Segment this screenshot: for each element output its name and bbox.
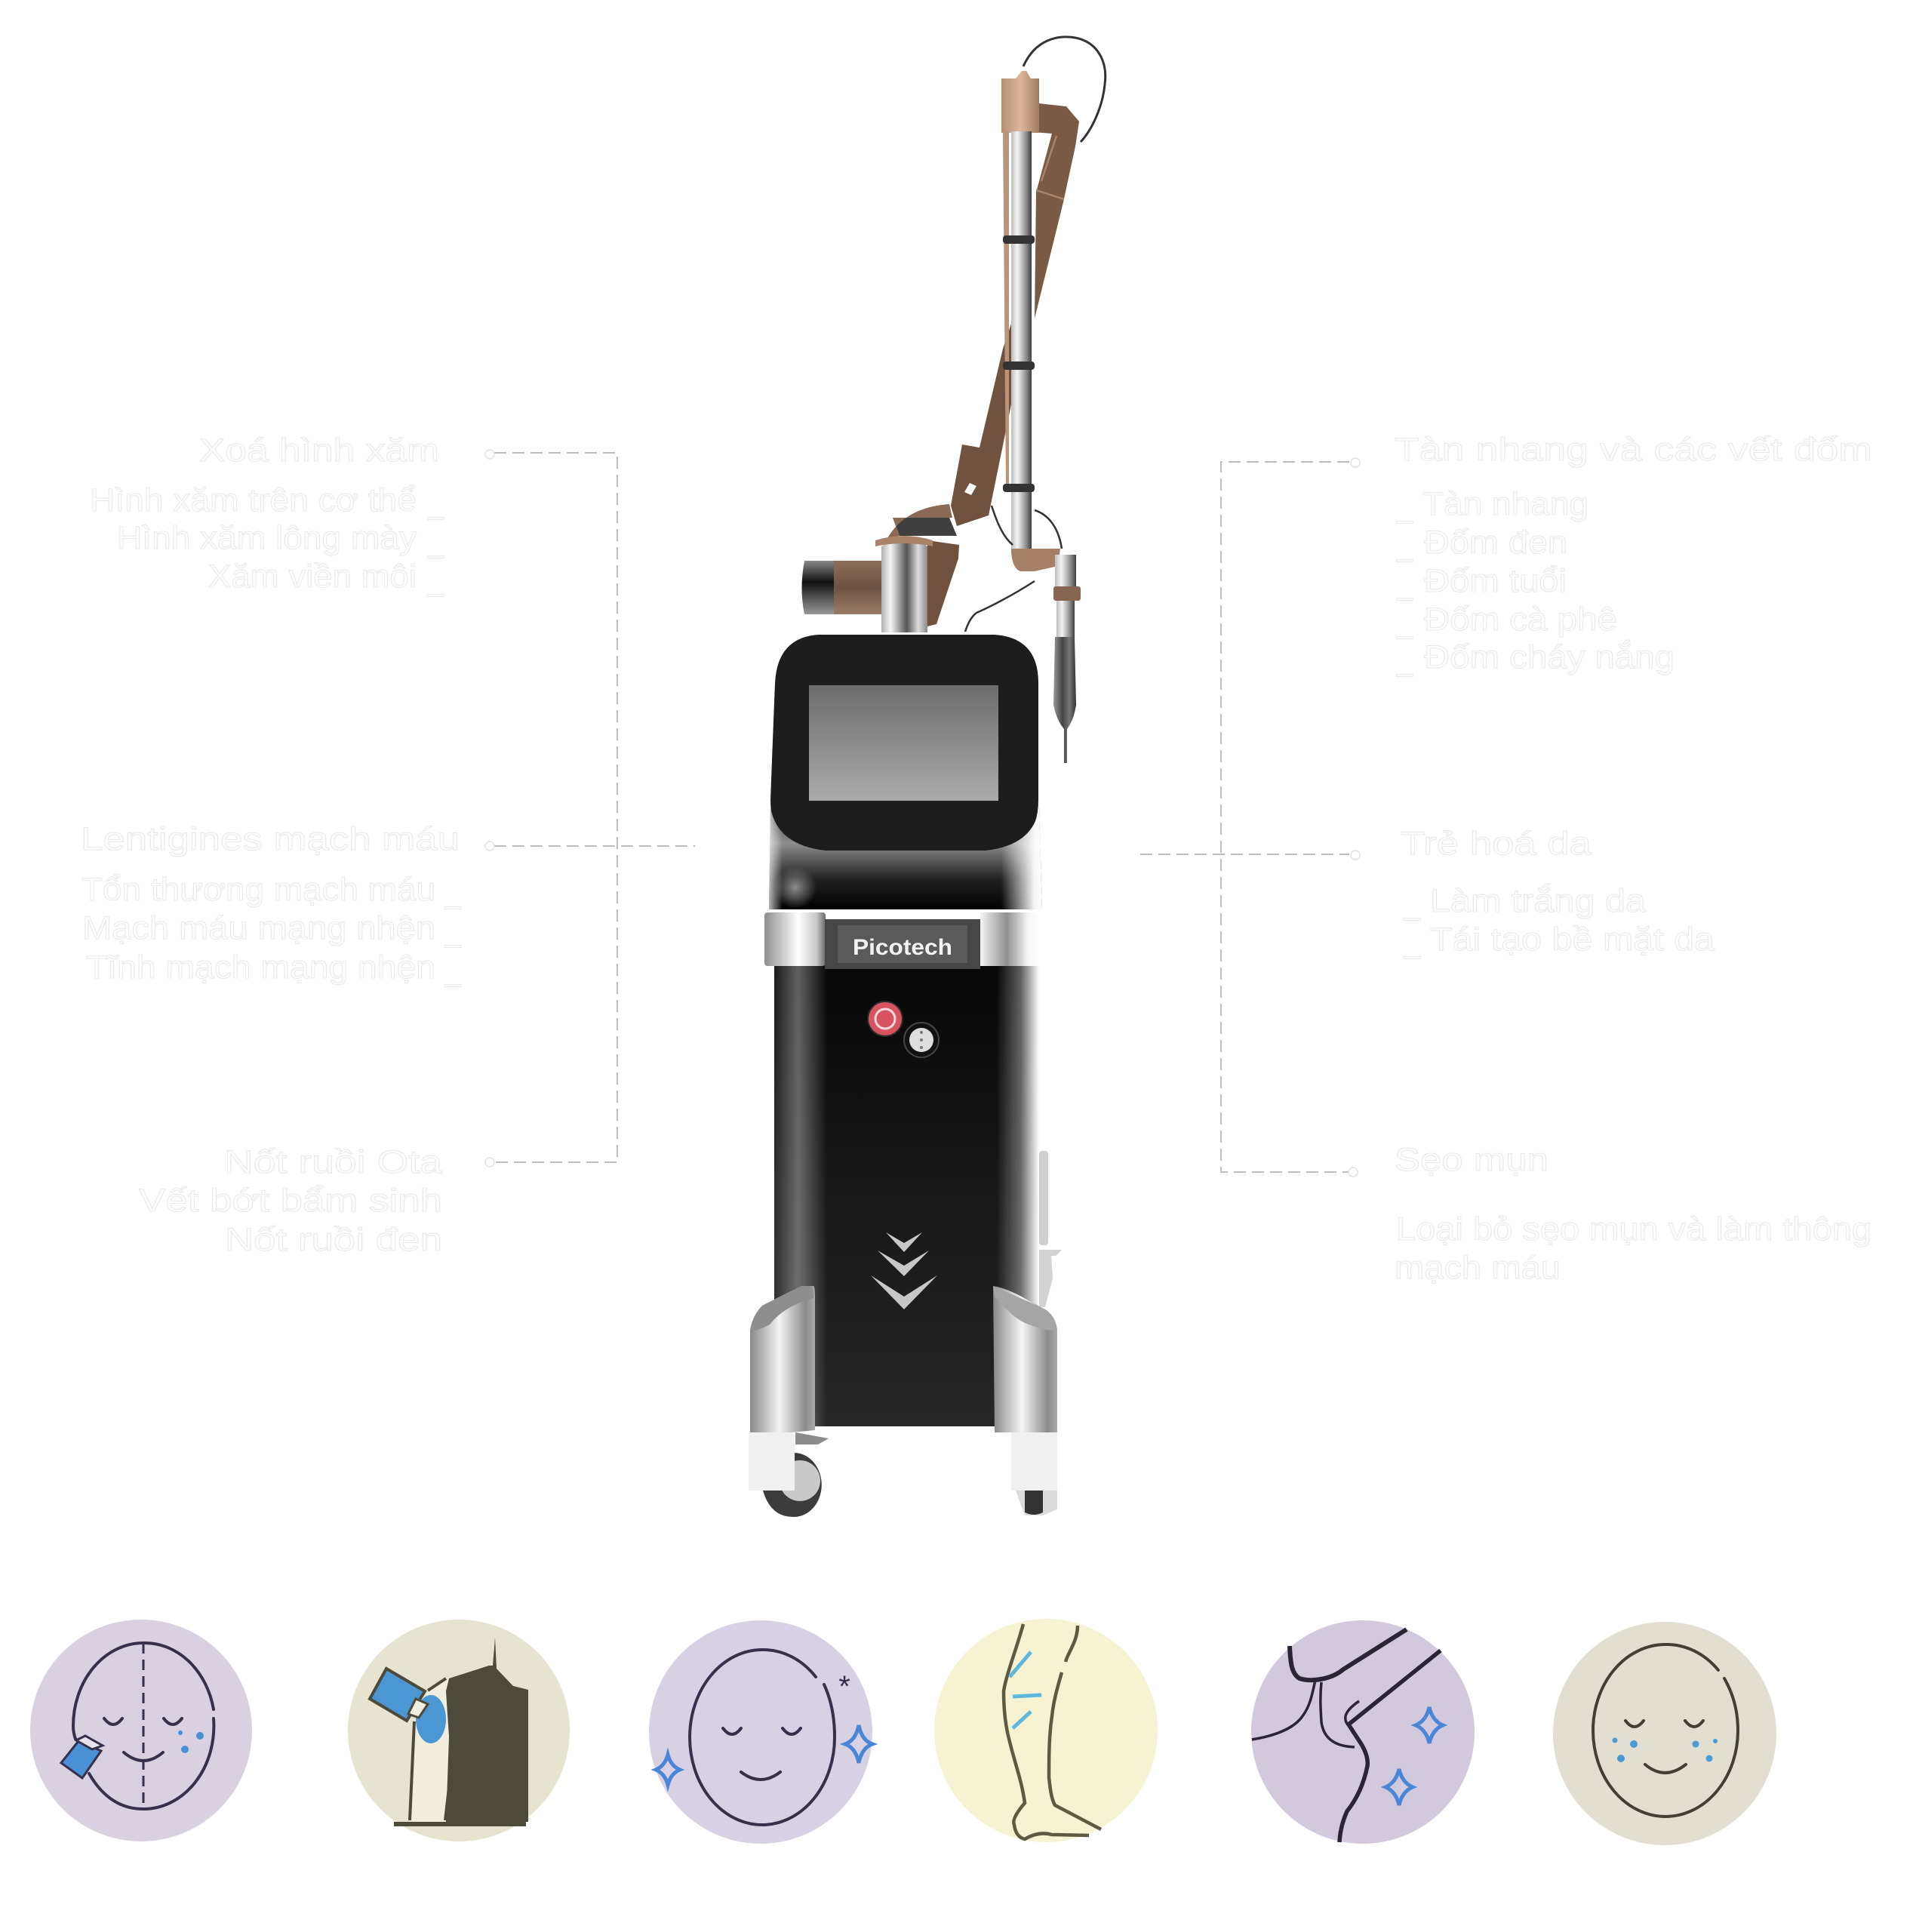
black cylinder end — [801, 561, 834, 614]
text block: freckles and spots: Đốm cà phê — [1424, 601, 1617, 638]
copper wedge behind column — [927, 540, 959, 626]
text block: freckles and spots: _ — [1396, 488, 1413, 525]
lower arm copper — [951, 324, 1011, 526]
left foot — [749, 1286, 829, 1517]
key switch — [904, 1023, 939, 1057]
black strap bottom — [1003, 484, 1035, 492]
articulated arm — [801, 37, 1106, 763]
text block: vascular lentigines: _ — [444, 952, 462, 988]
text block: tattoo removal: _ — [427, 523, 444, 559]
text block: skin rejuvenation: Làm trắng da — [1430, 883, 1646, 919]
text block: freckles and spots: Tàn nhang — [1422, 486, 1588, 522]
touch screen — [809, 685, 998, 801]
text block: skin rejuvenation — [1401, 826, 1715, 960]
text block: vascular lentigines: Tĩnh mạch mạng nhện — [86, 949, 435, 986]
upper arm copper — [1033, 103, 1079, 318]
text block: freckles and spots: Đốm đen — [1424, 525, 1567, 561]
emergency stop button — [867, 1001, 903, 1037]
text block: moles and birthmarks: Nốt ruồi đen — [225, 1222, 442, 1258]
text block: skin rejuvenation: _ — [1403, 924, 1421, 960]
machine: Picotech laser device — [749, 37, 1106, 1517]
text block: moles and birthmarks: Nốt ruồi Ota — [224, 1144, 442, 1180]
text block: freckles and spots: _ — [1396, 527, 1413, 563]
text block: tattoo removal: _ — [427, 561, 444, 598]
text block: freckles and spots: Đốm cháy nắng — [1424, 639, 1675, 675]
silver band right — [980, 912, 1039, 966]
body shoulder — [769, 808, 1042, 909]
text block: tattoo removal: Hình xăm lông mày — [117, 520, 417, 556]
copper hump — [887, 504, 952, 538]
dark top plate — [893, 518, 957, 536]
horizontal copper cylinder — [834, 561, 887, 614]
name badge — [825, 919, 980, 969]
text block: tattoo removal: Xăm viền môi — [208, 558, 417, 595]
text block: moles and birthmarks — [139, 1144, 442, 1258]
text block: skin rejuvenation: Trẻ hoá da — [1401, 826, 1592, 862]
text block: tattoo removal: Hình xăm trên cơ thể — [90, 482, 417, 518]
side holder — [1039, 1151, 1062, 1307]
copper elbow at top — [1001, 71, 1039, 133]
text block: tattoo removal — [90, 432, 444, 598]
icon: glowing face with sparkles — [649, 1620, 872, 1844]
text block: vascular lentigines: Mạch máu mạng nhện — [82, 910, 435, 946]
text block: moles and birthmarks: Vết bớt bẩm sinh — [139, 1183, 442, 1219]
text block: acne scars: Sẹo mụn — [1395, 1142, 1548, 1178]
copper side strip — [1003, 131, 1009, 486]
lower cables — [965, 506, 1062, 632]
icon: leg with spider veins — [934, 1619, 1158, 1842]
black strap top — [1003, 235, 1035, 244]
icon: glowing face with sparkles: * — [838, 1670, 850, 1703]
text block: acne scars: Loại bỏ sẹo mụn và làm thông — [1396, 1211, 1871, 1247]
icon: face treatment with dashed midline — [30, 1620, 252, 1841]
text block: tattoo removal: _ — [427, 485, 444, 521]
text block: vascular lentigines: _ — [444, 912, 462, 949]
text block: skin rejuvenation: _ — [1403, 885, 1421, 921]
icon: underarm with sparkles — [1251, 1620, 1475, 1844]
silver column — [881, 540, 927, 632]
handpiece — [1053, 555, 1081, 763]
text block: freckles and spots: Tàn nhang và các vết đốm — [1395, 432, 1872, 468]
column copper ring — [875, 536, 933, 546]
text block: vascular lentigines: Tổn thương mạch máu — [81, 872, 435, 908]
upper arm seam — [1036, 136, 1064, 199]
text block: freckles and spots: _ — [1396, 641, 1413, 678]
black strap middle — [1003, 361, 1035, 370]
text block: vascular lentigines: _ — [444, 874, 462, 910]
text block: freckles and spots: Đốm tuổi — [1424, 563, 1567, 599]
vertical silver tube — [1011, 131, 1032, 554]
lower elbow copper — [1011, 549, 1060, 571]
text block: freckles and spots: _ — [1396, 604, 1413, 640]
text block: vascular lentigines — [81, 821, 462, 988]
text block: acne scars: mạch máu — [1395, 1250, 1561, 1286]
right foot — [993, 1286, 1057, 1515]
brand label: Picotech — [853, 935, 952, 960]
chevron marks — [871, 1232, 937, 1309]
text block: freckles and spots: _ — [1396, 565, 1413, 601]
text block: acne scars — [1395, 1142, 1871, 1286]
text block: tattoo removal: Xoá hình xăm — [199, 432, 439, 469]
head panel — [770, 635, 1038, 851]
main body — [774, 962, 1039, 1426]
callout lines left — [485, 450, 695, 1167]
top cable — [1023, 37, 1106, 142]
icon: body treatment with blue patch — [348, 1620, 570, 1841]
text block: freckles and spots — [1395, 432, 1872, 678]
text block: skin rejuvenation: Tái tạo bề mặt da — [1430, 921, 1715, 958]
text block: vascular lentigines: Lentigines mạch máu — [81, 821, 460, 857]
silver band left — [764, 912, 826, 966]
icon: face with acne marks — [1553, 1622, 1776, 1845]
callout lines right — [1140, 458, 1360, 1177]
